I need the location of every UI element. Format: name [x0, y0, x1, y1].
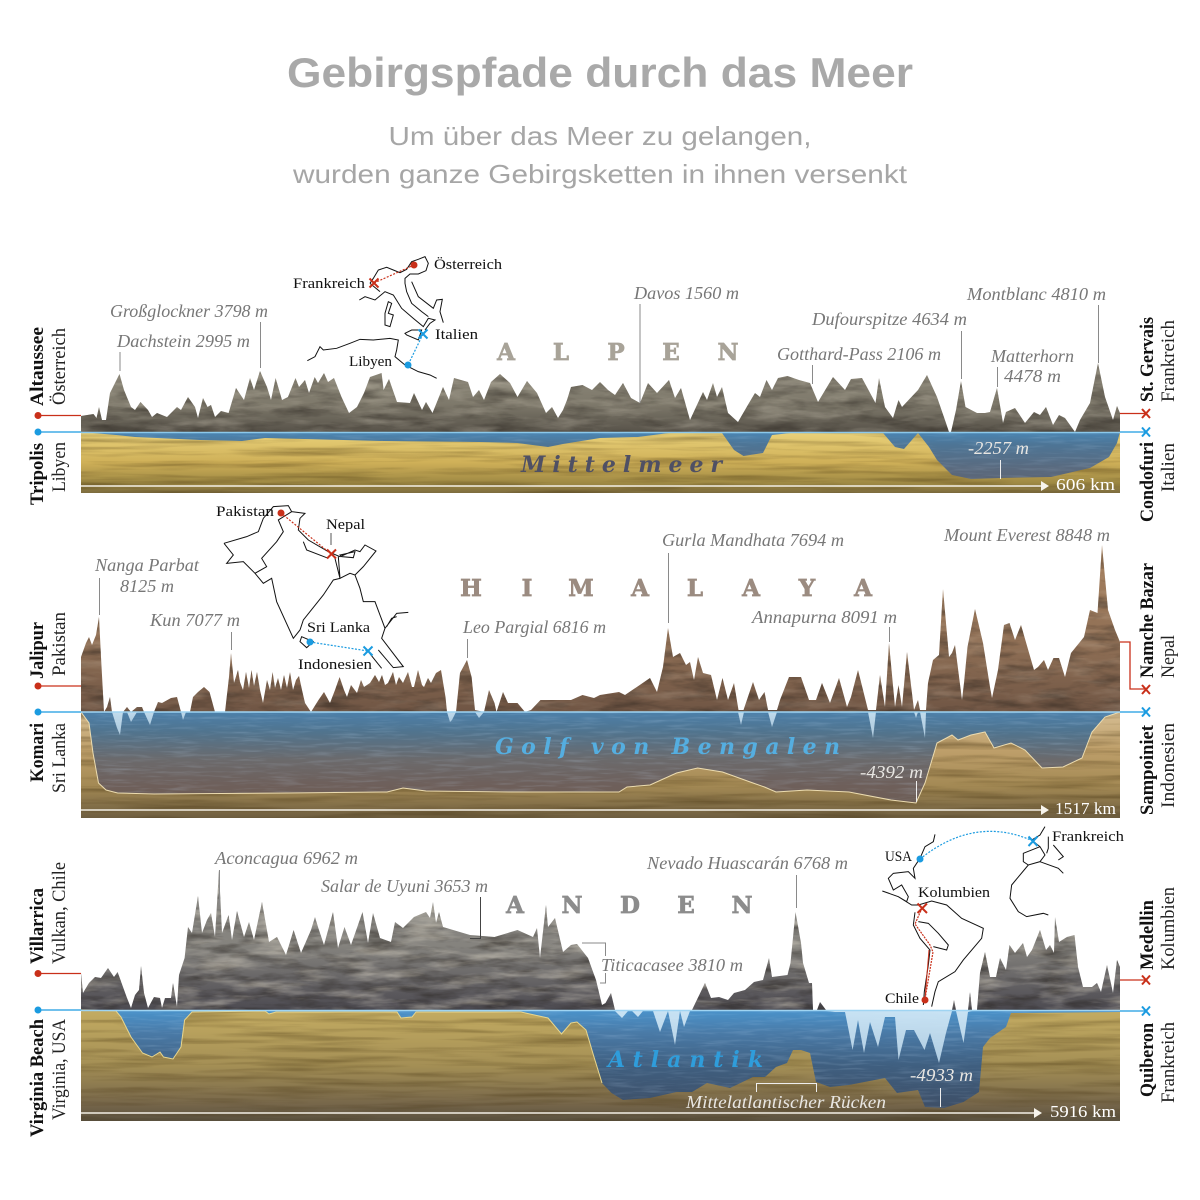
place labels left and right: Italien — [1158, 442, 1179, 492]
place labels left and right: Nepal — [1158, 635, 1179, 678]
distance arrow 5916 km: 5916 km — [1050, 1102, 1116, 1121]
range name: Anden: N — [561, 892, 583, 919]
peak labels: Himalaya: Nanga Parbat — [94, 555, 200, 575]
range name: Anden: E — [677, 892, 695, 919]
range name: Alpen: L — [553, 339, 569, 366]
peak labels: Alpen: -2257 m — [968, 438, 1029, 458]
peak labels: Himalaya: -4392 m — [860, 762, 923, 782]
distance arrow 606 km — [81, 475, 1115, 494]
place labels left and right: Namche Bazar — [1137, 562, 1158, 678]
range name: Anden: N — [731, 892, 753, 919]
sea water: Atlantik — [81, 1010, 1120, 1121]
map: Österreich nach Frankreich, Libyen nach Italien: Österreich — [434, 256, 503, 273]
place labels left and right: Frankreich — [1158, 1022, 1179, 1103]
place labels left and right: Virginia, USA — [49, 1019, 70, 1120]
map: Österreich nach Frankreich, Libyen nach Italien: Italien — [435, 327, 479, 343]
start markers left — [34, 682, 81, 716]
place labels left and right: Virginia Beach — [27, 1019, 48, 1137]
peak labels: Himalaya — [94, 525, 1110, 802]
range name: Himalaya: H — [460, 575, 482, 602]
subtitle line 1: Um über das Meer zu gelangen, — [388, 121, 812, 151]
place labels left and right: Komari — [27, 723, 48, 782]
map: Österreich nach Frankreich, Libyen nach Italien: Libyen — [349, 354, 392, 370]
peak labels: Himalaya: Gurla Mandhata 7694 m — [662, 530, 844, 550]
peak labels: Alpen: 4478 m — [1004, 366, 1061, 386]
panel: Himalaya / Golf von Bengalen — [27, 504, 1179, 818]
map: Pakistan nach Nepal, Sri Lanka nach Indonesien: Pakistan — [216, 504, 275, 520]
place labels left and right — [27, 862, 1179, 1137]
end markers right — [1120, 642, 1150, 716]
place labels left and right: Medellin — [1137, 900, 1158, 970]
panel: Alpen / Mittelmeer — [27, 256, 1179, 522]
map: Österreich nach Frankreich, Libyen nach Italien: Frankreich — [293, 276, 366, 292]
place labels left and right: Indonesien — [1158, 722, 1179, 808]
map: Pakistan nach Nepal, Sri Lanka nach Indonesien — [216, 504, 408, 673]
peak labels: Himalaya: Kun 7077 m — [149, 610, 240, 630]
range name: Himalaya: A — [630, 575, 650, 602]
range name: Himalaya: L — [687, 575, 703, 602]
range name: Alpen: P — [607, 339, 625, 366]
place labels left and right: Quiberon — [1137, 1023, 1158, 1097]
distance arrow 5916 km — [81, 1102, 1116, 1121]
peak labels: Anden: -4933 m — [910, 1065, 973, 1085]
range name: Alpen: A — [496, 339, 516, 366]
map: Chile nach Kolumbien, USA nach Frankreich: Chile — [885, 991, 919, 1007]
range name: Himalaya — [460, 575, 873, 602]
map: Pakistan nach Nepal, Sri Lanka nach Indonesien: Sri Lanka — [307, 620, 370, 636]
place labels left and right: Jalipur — [27, 621, 48, 679]
mountain profile: Himalaya — [81, 540, 1120, 713]
map: Chile nach Kolumbien, USA nach Frankreich — [882, 827, 1125, 1007]
peak labels: Himalaya: Annapurna 8091 m — [751, 607, 897, 627]
map: Pakistan nach Nepal, Sri Lanka nach Indonesien: Indonesien — [298, 657, 373, 673]
sea level line — [81, 711, 1120, 713]
map: Pakistan nach Nepal, Sri Lanka nach Indonesien: Nepal — [326, 517, 365, 533]
map: Österreich nach Frankreich, Libyen nach Italien — [293, 256, 503, 378]
mirrored valleys under water — [615, 1011, 977, 1063]
sea floor profile — [81, 432, 1120, 493]
place labels left and right — [27, 317, 1179, 522]
sea name: Atlantik: Atlantik — [606, 1047, 763, 1073]
map: Chile nach Kolumbien, USA nach Frankreich: Kolumbien — [918, 885, 991, 901]
start markers left — [34, 412, 81, 436]
distance arrow 606 km: 606 km — [1056, 475, 1115, 494]
range name: Alpen: N — [717, 339, 739, 366]
range name: Himalaya: M — [568, 575, 594, 602]
peak labels: Alpen: Dufourspitze 4634 m — [811, 309, 967, 329]
place labels left and right — [27, 562, 1179, 815]
map: Chile nach Kolumbien, USA nach Frankreich: USA — [885, 849, 912, 865]
range name: Anden — [505, 892, 753, 919]
peak labels: Anden: Titicacasee 3810 m — [601, 955, 743, 975]
distance arrow 1517 km — [81, 799, 1116, 818]
range name: Himalaya: Y — [798, 575, 816, 602]
sea floor outline — [81, 1010, 602, 1083]
range name: Anden: D — [620, 892, 640, 919]
peak labels: Anden: Mittelatlantischer Rücken — [685, 1092, 886, 1112]
peak labels: Alpen — [110, 283, 1106, 479]
place labels left and right: Sri Lanka — [49, 722, 70, 793]
subtitle line 2: wurden ganze Gebirgsketten in ihnen versenkt — [292, 159, 908, 189]
sea floor outline — [81, 712, 1120, 803]
range name: Himalaya: I — [522, 575, 532, 602]
place labels left and right: St. Gervais — [1137, 317, 1158, 402]
mountain profile: Alpen — [81, 360, 1120, 433]
sea floor profile — [81, 712, 1120, 818]
sea water: Mittelmeer — [81, 432, 1120, 493]
place labels left and right: Libyen — [49, 442, 70, 492]
place labels left and right: Villarrica — [27, 888, 48, 964]
range name: Alpen: E — [662, 339, 680, 366]
map: Chile nach Kolumbien, USA nach Frankreich: Frankreich — [1052, 829, 1125, 845]
peak labels: Alpen: Davos 1560 m — [633, 283, 739, 303]
range name: Himalaya: A — [741, 575, 761, 602]
panel: Anden / Atlantik — [27, 827, 1179, 1137]
peak labels: Himalaya: Leo Pargial 6816 m — [462, 617, 606, 637]
sea floor profile — [81, 1010, 1120, 1121]
place labels left and right: Sampoiniet — [1137, 724, 1158, 815]
end markers right — [1120, 409, 1150, 436]
start markers left — [34, 970, 81, 1014]
sea level line — [81, 432, 1120, 434]
place labels left and right: Tripolis — [27, 443, 48, 505]
mountain profile: Anden — [81, 865, 1120, 1011]
sea level line — [81, 1010, 1120, 1012]
peak labels: Himalaya: Mount Everest 8848 m — [943, 525, 1110, 545]
distance arrow 1517 km: 1517 km — [1055, 799, 1116, 818]
peak labels: Alpen: Montblanc 4810 m — [966, 284, 1106, 304]
range name: Anden: A — [505, 892, 525, 919]
sea water: Golf von Bengalen — [81, 712, 1120, 818]
place labels left and right: Pakistan — [49, 612, 70, 676]
peak labels: Himalaya: 8125 m — [120, 576, 174, 596]
place labels left and right: Vulkan, Chile — [49, 862, 70, 964]
range name: Alpen — [496, 339, 739, 366]
place labels left and right: Condofuri — [1137, 442, 1158, 522]
peak labels: Alpen: Matterhorn — [990, 346, 1074, 366]
mirrored valleys under water — [112, 712, 926, 738]
peak labels: Anden: Nevado Huascarán 6768 m — [646, 853, 848, 873]
range name: Himalaya: A — [853, 575, 873, 602]
place labels left and right: Österreich — [49, 328, 70, 405]
title: Gebirgspfade durch das Meer — [287, 49, 913, 96]
peak labels: Alpen: Gotthard-Pass 2106 m — [777, 344, 941, 364]
sea name: Mittelmeer: Mittelmeer — [520, 452, 723, 478]
end markers right — [1120, 976, 1150, 1016]
peak labels: Anden — [214, 848, 973, 1112]
peak labels: Alpen: Dachstein 2995 m — [116, 331, 250, 351]
sea name: Golf von Bengalen: Golf von Bengalen — [495, 734, 840, 760]
place labels left and right: Frankreich — [1158, 320, 1179, 402]
peak labels: Anden: Salar de Uyuni 3653 m — [321, 876, 488, 896]
peak labels: Alpen: Großglockner 3798 m — [110, 301, 268, 321]
place labels left and right: Kolumbien — [1158, 887, 1179, 970]
place labels left and right: Altaussee — [27, 327, 48, 406]
peak labels: Anden: Aconcagua 6962 m — [214, 848, 358, 868]
